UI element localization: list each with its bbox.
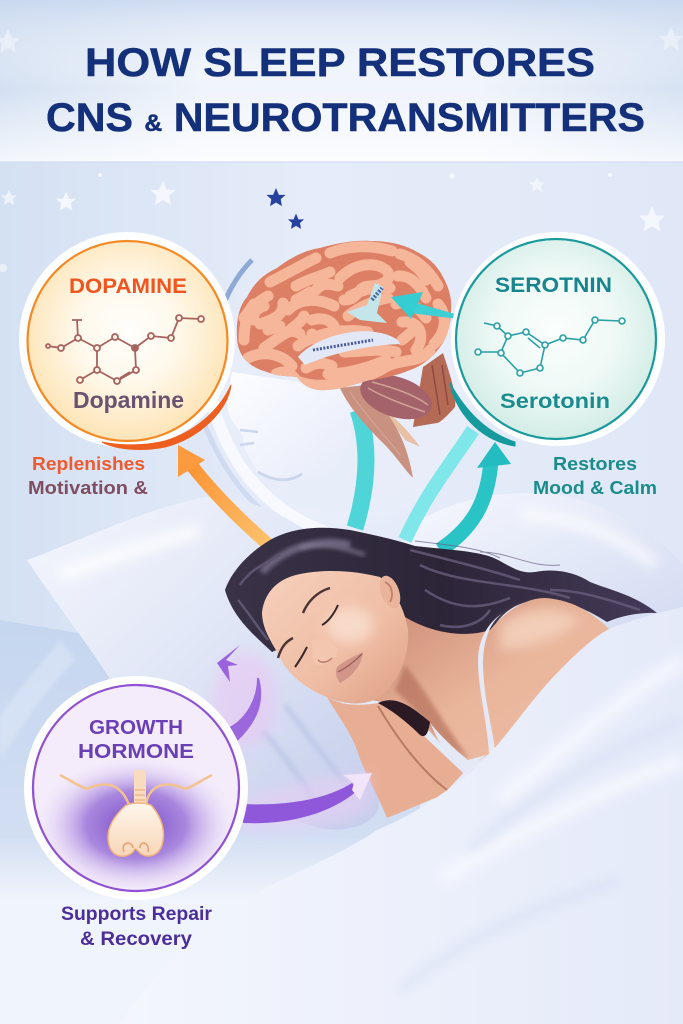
caption: serotonin: Mood & Calm (533, 478, 657, 498)
ghost face silhouette (203, 260, 472, 538)
purple arrow: upward (213, 645, 277, 748)
arm (327, 697, 463, 818)
eyebrows and eyes (303, 588, 330, 613)
sleeping woman (225, 528, 657, 818)
blanket (120, 607, 683, 1024)
label patches on brain (298, 331, 400, 365)
heading: dopamine: DOPAMINE (69, 275, 187, 298)
bed sheet (0, 620, 420, 1024)
tank top (430, 613, 503, 773)
brainstem and cerebellum (340, 353, 455, 478)
heading: growth hormone: HORMONE (78, 741, 194, 763)
nose (312, 639, 338, 665)
sheet fade at foot of page (0, 835, 420, 1024)
brain (230, 235, 460, 478)
teal pathway bands (355, 410, 473, 540)
right pillow (400, 493, 683, 640)
purple arrow: rightward (240, 773, 372, 831)
hair (225, 528, 657, 652)
arrow: serotonin to brain (391, 292, 483, 322)
cerebrum (236, 240, 452, 390)
molecule: serotonin (475, 317, 625, 376)
arrow: brain to serotonin (440, 442, 511, 550)
title (46, 41, 645, 140)
caption: dopamine: Motivation & (28, 478, 148, 498)
navy stars (266, 188, 304, 229)
caption: serotonin (533, 454, 657, 498)
heading: serotonin: SEROTNIN (495, 274, 612, 297)
panel: growth hormone (24, 676, 248, 900)
caption: growth hormone: Supports Repair (61, 904, 213, 925)
left pillow (27, 497, 379, 830)
neck, chest and shoulder (370, 598, 610, 772)
panel: serotonin (450, 232, 665, 446)
purple glow (48, 765, 224, 885)
caption: growth hormone (61, 904, 213, 950)
caption: growth hormone: & Recovery (80, 929, 192, 950)
label: dopamine: Dopamine (73, 387, 184, 413)
title: HOW SLEEP RESTORES (85, 41, 595, 85)
icon: pituitary gland (60, 770, 212, 856)
header band (0, 0, 683, 163)
label: serotonin: Serotonin (500, 390, 610, 413)
caption: dopamine (28, 454, 148, 498)
face (262, 571, 408, 704)
heading: growth hormone (78, 717, 194, 763)
arrow: brain to dopamine (178, 445, 270, 546)
caption: serotonin: Restores (553, 454, 637, 474)
lips (336, 652, 363, 683)
title: CNS & NEUROTRANSMITTERS (46, 96, 645, 140)
caption: dopamine: Replenishes (32, 454, 145, 474)
panel: dopamine (19, 232, 235, 449)
molecule: dopamine (46, 315, 204, 384)
heading: growth hormone: GROWTH (89, 717, 183, 739)
